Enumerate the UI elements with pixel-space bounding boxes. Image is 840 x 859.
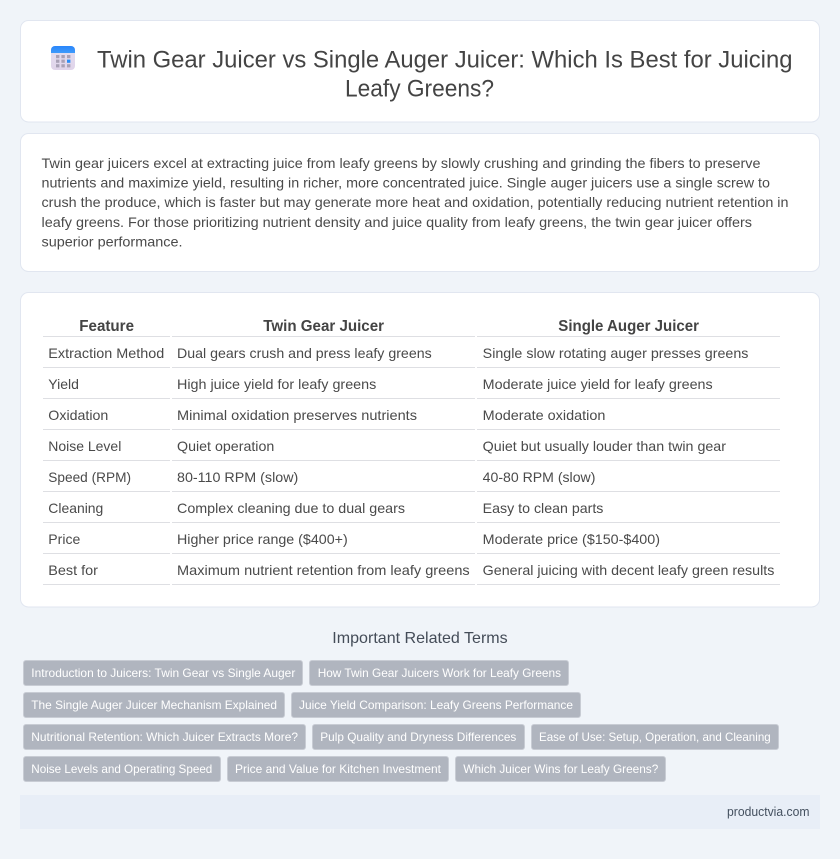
table row: price: Higher price range ($400+)	[177, 531, 348, 547]
table row: extraction method	[48, 345, 748, 361]
icon: calendar	[51, 46, 75, 70]
table header row: Twin Gear Juicer	[263, 318, 384, 335]
table row: noise level: Quiet operation	[177, 438, 274, 454]
table row: extraction method: Single slow rotating auger presses greens	[483, 345, 748, 361]
tag	[292, 692, 580, 718]
table row: yield: High juice yield for leafy greens	[177, 376, 376, 392]
text block: introduction paragraph: leafy greens. For those prioritizing nutrient density and juice quality from leafy greens, the twin gear juicer offers	[42, 214, 752, 230]
tag	[24, 756, 220, 782]
tag	[24, 724, 306, 750]
tag: Juice Yield Comparison: Leafy Greens Performance	[299, 698, 573, 712]
text block: introduction paragraph: superior performance.	[42, 233, 182, 249]
tag	[24, 692, 284, 718]
table row: extraction method: Extraction Method	[48, 345, 164, 361]
table row: best for: Best for	[48, 562, 98, 578]
tag: Ease of Use: Setup, Operation, and Cleaning	[539, 730, 771, 744]
tag: Noise Levels and Operating Speed	[31, 762, 212, 776]
text block: introduction paragraph: crush the produce, which is faster but may generate more heat and oxidation, potentially reducing nutrient retention in	[42, 194, 788, 210]
footer: productvia.com	[727, 805, 810, 819]
text block: introduction paragraph: Twin gear juicers excel at extracting juice from leafy greens by slowly crushing and grinding the fibers to preserve	[42, 155, 761, 171]
tag	[310, 660, 568, 686]
text block: introduction paragraph	[42, 155, 788, 249]
table row: noise level: Quiet but usually louder than twin gear	[483, 438, 726, 454]
table row: yield	[48, 376, 713, 392]
tag: Pulp Quality and Dryness Differences	[320, 730, 516, 744]
table header row: Feature	[79, 318, 134, 335]
title: Leafy Greens?	[345, 76, 494, 102]
table row: yield: Yield	[48, 376, 79, 392]
panel: introduction	[20, 134, 820, 272]
table header row	[79, 318, 699, 335]
panel: related term tags	[24, 660, 778, 782]
tag: The Single Auger Juicer Mechanism Explained	[31, 698, 277, 712]
tag: Price and Value for Kitchen Investment	[235, 762, 442, 776]
tag: How Twin Gear Juicers Work for Leafy Greens	[318, 666, 561, 680]
panel: title header	[20, 20, 820, 122]
table header row: Single Auger Juicer	[558, 318, 699, 335]
text block: introduction paragraph: nutrients and maximize yield, resulting in richer, more concentrated juice. Single auger juicers use a single screw to	[42, 175, 770, 191]
tag	[24, 660, 302, 686]
tag	[228, 756, 448, 782]
table row: cleaning: Complex cleaning due to dual gears	[177, 500, 405, 516]
table row: speed	[48, 469, 595, 485]
table row: best for: General juicing with decent leafy green results	[483, 562, 774, 578]
tag: Nutritional Retention: Which Juicer Extracts More?	[31, 730, 298, 744]
table row: cleaning: Easy to clean parts	[483, 500, 603, 516]
table row: yield: Moderate juice yield for leafy greens	[483, 376, 713, 392]
table row: price	[48, 531, 660, 547]
footer	[20, 795, 820, 829]
tag	[456, 756, 666, 782]
title	[97, 46, 792, 102]
table row: speed: 80-110 RPM (slow)	[177, 469, 298, 485]
table row: cleaning	[48, 500, 603, 516]
title: Twin Gear Juicer vs Single Auger Juicer: Which Is Best for Juicing	[97, 46, 792, 74]
table row: noise level	[48, 438, 726, 454]
tag	[312, 724, 524, 750]
table row: oxidation: Oxidation	[48, 407, 108, 423]
table row: speed: Speed (RPM)	[48, 469, 131, 485]
panel: comparison table	[20, 292, 820, 607]
tag: Introduction to Juicers: Twin Gear vs Single Auger	[31, 666, 295, 680]
table row: speed: 40-80 RPM (slow)	[483, 469, 595, 485]
table row: noise level: Noise Level	[48, 438, 121, 454]
tag: Which Juicer Wins for Leafy Greens?	[463, 762, 659, 776]
heading: important related terms: Important Related Terms	[332, 630, 508, 647]
table row: price: Price	[48, 531, 81, 547]
table row: best for	[48, 562, 774, 578]
table row: oxidation: Moderate oxidation	[483, 407, 605, 423]
tag	[532, 724, 778, 750]
table row: cleaning: Cleaning	[48, 500, 103, 516]
table row: best for: Maximum nutrient retention from leafy greens	[177, 562, 470, 578]
table row: oxidation: Minimal oxidation preserves nutrients	[177, 407, 417, 423]
table row: oxidation	[48, 407, 605, 423]
table row: price: Moderate price ($150-$400)	[483, 531, 660, 547]
table row: extraction method: Dual gears crush and press leafy greens	[177, 345, 432, 361]
